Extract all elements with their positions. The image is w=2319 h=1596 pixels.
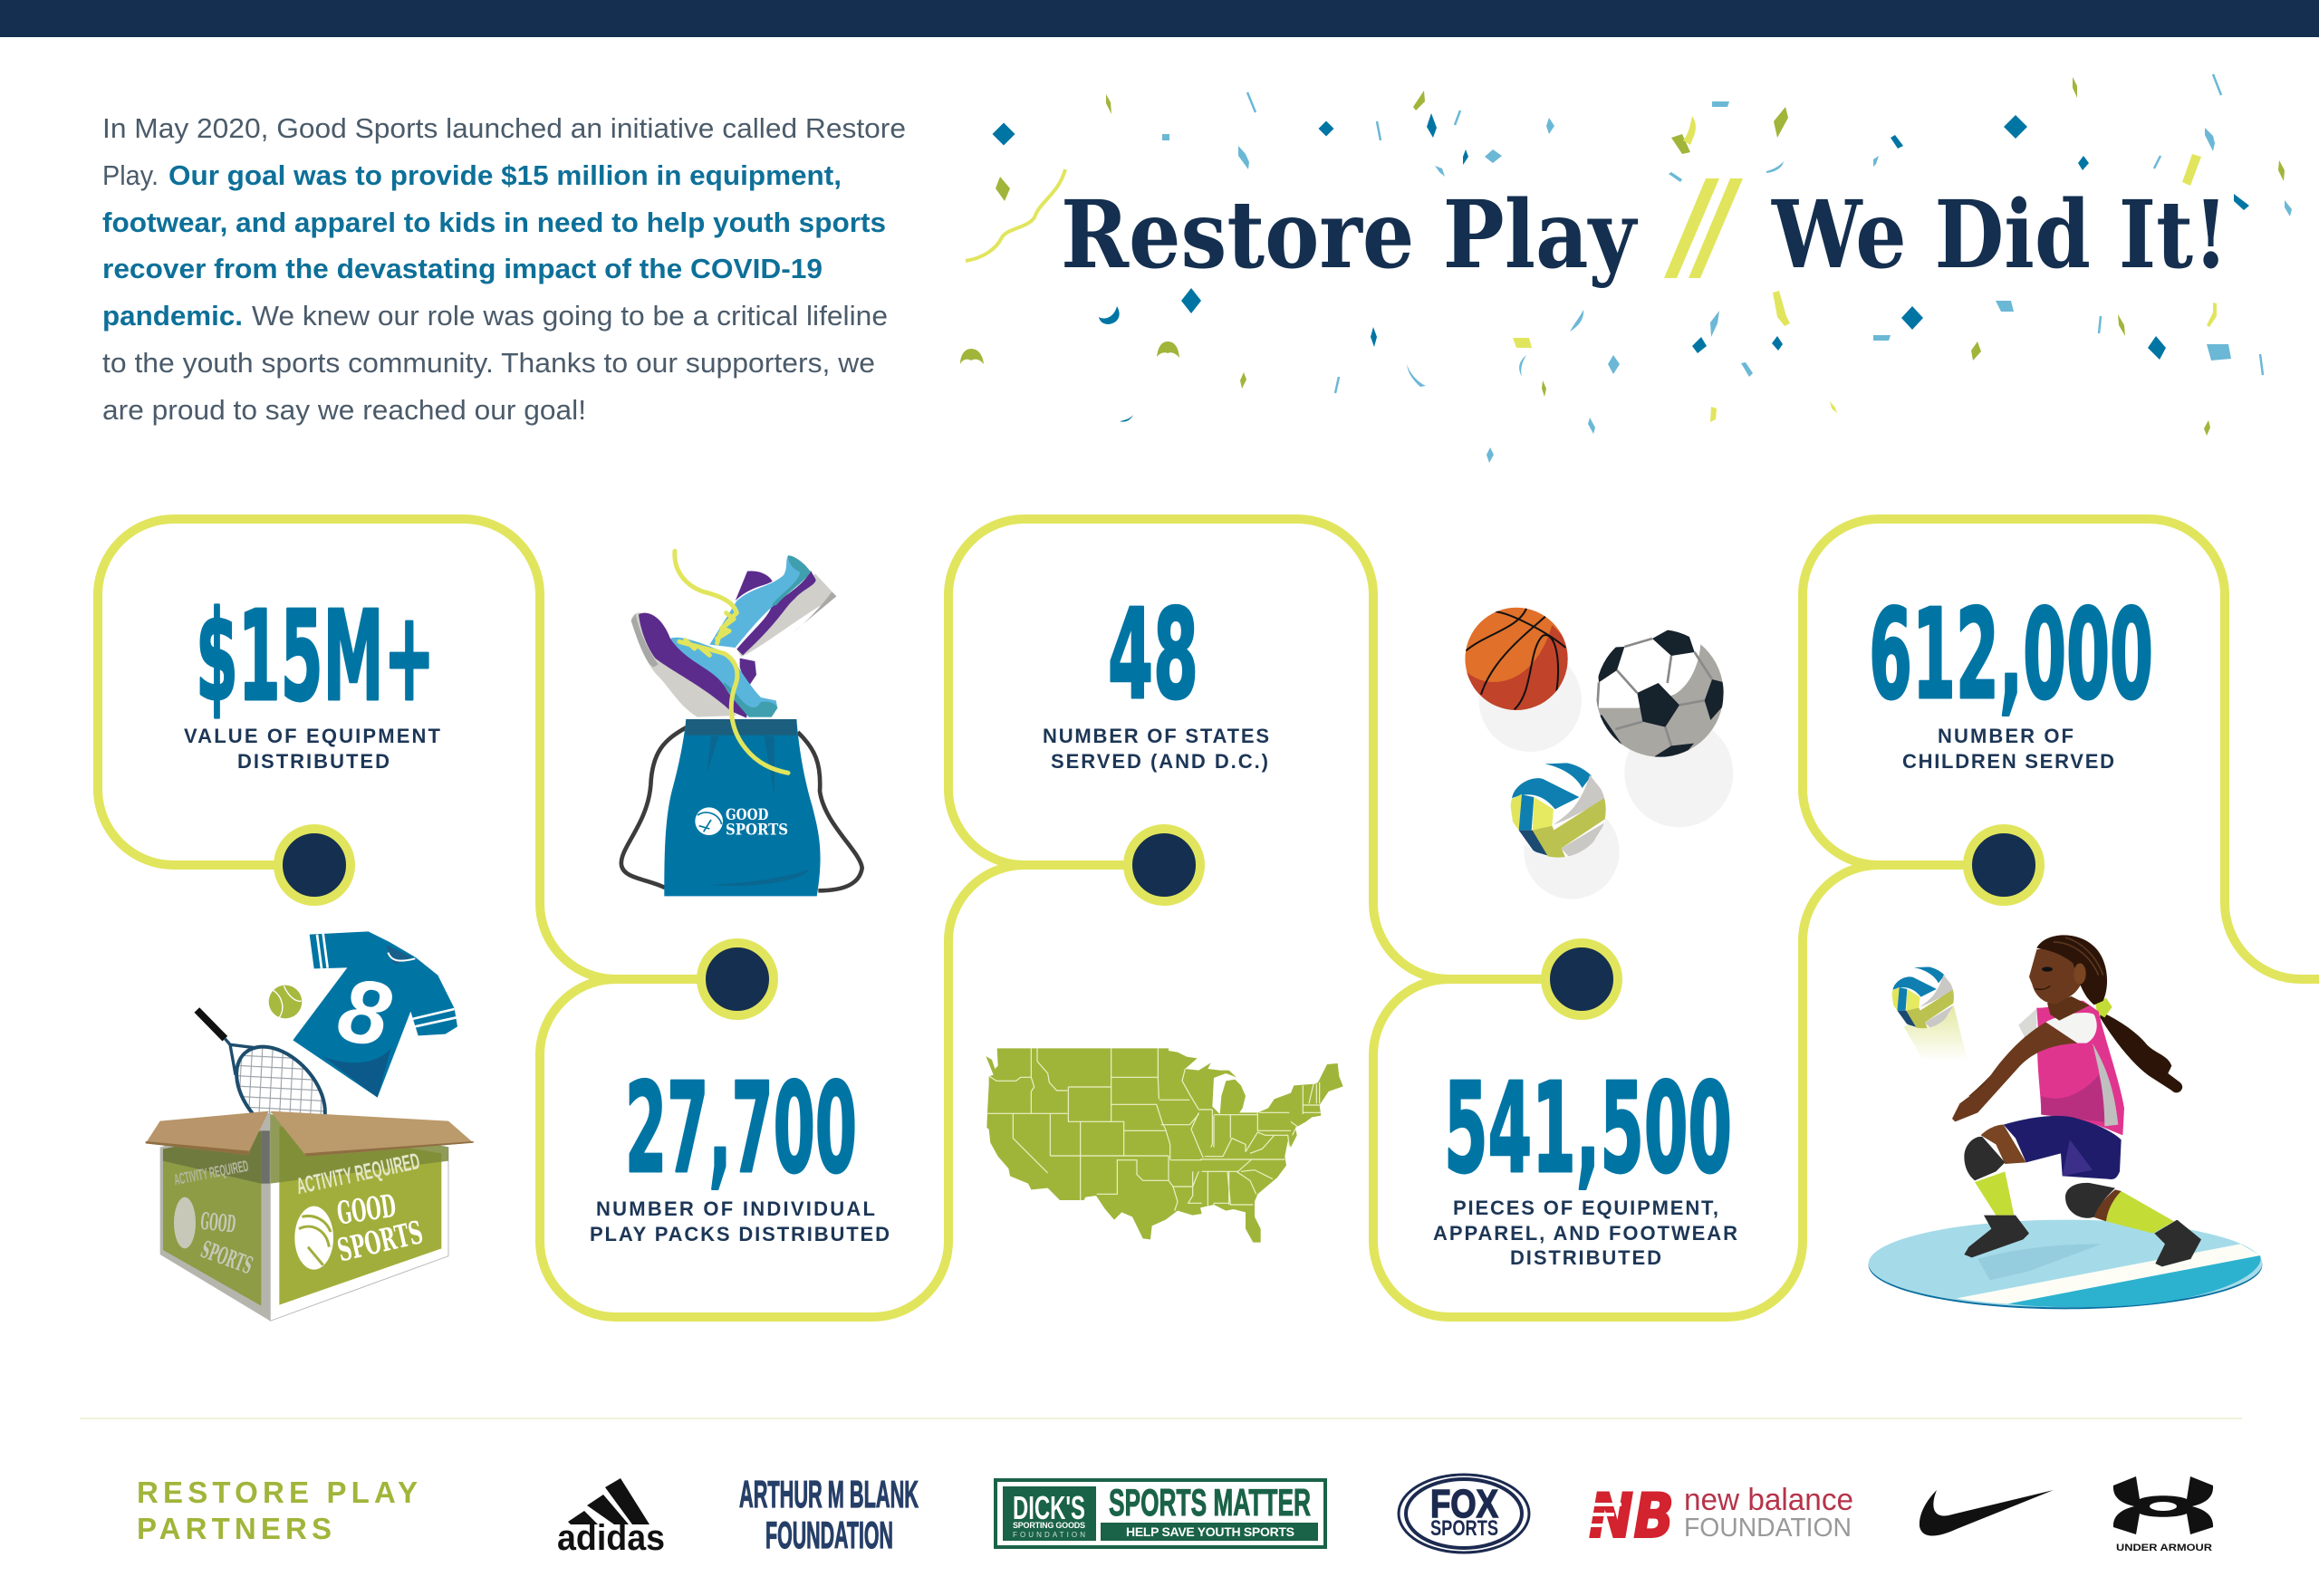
top navy band: [0, 0, 2319, 37]
far arm: [1968, 1031, 2035, 1099]
icon: box with jersey, racket and ball: [146, 931, 474, 1321]
illustration: volleyball player: [1869, 935, 2262, 1309]
intro paragraph: to the youth sports community. Thanks to our supporters, we: [102, 347, 875, 379]
shoelaces: [675, 551, 788, 773]
box right face text: GOOD: [335, 1187, 399, 1233]
panel: 48 states: SERVED (AND D.C.): [1051, 750, 1268, 773]
intro paragraph: recover from the devastating impact of the COVID-19: [102, 253, 823, 284]
bag logo: [695, 805, 788, 839]
intro paragraph: We knew our role was going to be a critical lifeline: [252, 300, 888, 332]
box left face text: [172, 1157, 256, 1280]
rear knee, sock and shoe: [2065, 1183, 2201, 1266]
panel: $15M+ equipment value: DISTRIBUTED: [237, 750, 390, 773]
top shoe: [709, 555, 836, 657]
bag logo: GOOD: [726, 805, 768, 823]
panel: $15M+ equipment value: [98, 519, 737, 979]
logo: Under Armour: [2113, 1476, 2213, 1553]
neck and head: [2029, 935, 2107, 1021]
logo: adidas: [557, 1478, 665, 1558]
confetti: [960, 74, 2292, 463]
intro paragraph: are proud to say we reached our goal!: [102, 394, 586, 426]
front thigh: [1981, 1125, 2026, 1164]
icon: racket: [197, 1010, 342, 1156]
logo: Dick's Sports Matter: FOUNDATION: [1013, 1531, 1085, 1539]
logo: Dick's Sports Matter: [996, 1480, 1325, 1547]
panel: 541,500 pieces: [1373, 865, 2004, 1317]
footer heading: partners: [137, 1476, 418, 1545]
panel: 27,700 play packs: NUMBER OF INDIVIDUAL: [596, 1197, 875, 1220]
title: [1061, 178, 2228, 290]
box flaps: [146, 1111, 474, 1157]
near arm: [1952, 1013, 2097, 1121]
intro paragraph: [102, 112, 906, 426]
logo: adidas: adidas: [557, 1518, 665, 1558]
bag logo: SPORTS: [726, 821, 788, 839]
intro paragraph: pandemic.: [102, 300, 243, 332]
ponytail: [2095, 998, 2182, 1092]
icon: jersey: 8: [332, 958, 398, 1067]
jersey: [2018, 1001, 2124, 1135]
intro paragraph: footwear, and apparel to kids in need to help youth sports: [102, 207, 886, 238]
logo: Nike swoosh: [1920, 1490, 2054, 1536]
logo: New Balance Foundation: FOUNDATION: [1684, 1514, 1852, 1543]
logo: Arthur M Blank Foundation: FOUNDATION: [765, 1514, 893, 1556]
panel: $15M+ equipment value: VALUE OF EQUIPMENT: [184, 725, 441, 747]
footer heading: partners: PARTNERS: [137, 1512, 332, 1545]
logo: Dick's Sports Matter: SPORTS MATTER: [1109, 1481, 1311, 1524]
panel: $15M+ equipment value: $15M+: [196, 585, 435, 729]
court disc: [1869, 1220, 2262, 1309]
front knee, sock and shoe: [1964, 1137, 2029, 1257]
logo: Fox Sports: FOX: [1430, 1482, 1498, 1526]
panel: 541,500 pieces: PIECES OF EQUIPMENT,: [1453, 1197, 1718, 1219]
box left face text: GOOD: [199, 1208, 237, 1239]
box right face text: ACTIVITY REQUIRED: [294, 1149, 422, 1199]
title slashes: [1664, 178, 1743, 278]
title: Restore Play: [1061, 180, 1639, 290]
logo: Fox Sports: SPORTS: [1430, 1516, 1498, 1541]
ball trail: [1904, 1005, 1968, 1062]
icon: soccer ball: [1596, 630, 1724, 757]
intro paragraph: In May 2020, Good Sports launched an initiative called Restore: [102, 112, 906, 144]
panel: 612,000 children: [1803, 519, 2319, 979]
logo: Dick's Sports Matter: SPORTING GOODS: [1013, 1521, 1085, 1530]
box right face text: SPORTS: [334, 1214, 427, 1269]
footer rule: [80, 1418, 2242, 1419]
icon: volleyball: [1510, 762, 1606, 858]
logo: Arthur M Blank Foundation: ARTHUR M BLANK: [739, 1473, 919, 1515]
panel: 27,700 play packs: PLAY PACKS DISTRIBUTED: [590, 1223, 890, 1245]
panel: 27,700 play packs: 27,700: [625, 1057, 857, 1201]
panel: 541,500 pieces: APPAREL, AND FOOTWEAR: [1433, 1222, 1737, 1245]
panel: 48 states: 48: [1108, 583, 1198, 727]
bottom shoe: [631, 612, 777, 718]
box left face text: ACTIVITY REQUIRED: [172, 1157, 250, 1188]
panel: 541,500 pieces: 541,500: [1444, 1057, 1732, 1201]
icon: ball in play: [1891, 966, 1954, 1029]
intro paragraph: Our goal was to provide $15 million in equipment,: [168, 159, 842, 191]
shorts: [2004, 1116, 2122, 1179]
panel: 612,000 children: NUMBER OF: [1938, 725, 2074, 747]
intro paragraph: Play.: [102, 159, 159, 191]
logo: Fox Sports: [1399, 1475, 1529, 1553]
logo: New Balance Foundation: NB: [1589, 1481, 1674, 1553]
icon: shoes and drawstring bag: [621, 551, 862, 896]
logo: New Balance Foundation: [1585, 1481, 1853, 1553]
icon: US map: [986, 1048, 1343, 1243]
panel: 27,700 play packs: [540, 865, 1164, 1317]
icon: sports balls: [1465, 608, 1733, 899]
logo: Dick's Sports Matter: DICK'S: [1013, 1489, 1085, 1526]
footer heading: partners: RESTORE PLAY: [137, 1476, 418, 1509]
panel: 48 states: NUMBER OF STATES: [1043, 725, 1269, 747]
logo: New Balance Foundation: new balance: [1684, 1483, 1853, 1517]
panel: 48 states: [948, 519, 1582, 979]
icon: jersey: [293, 931, 457, 1098]
box faces: [160, 1112, 448, 1321]
logo: Under Armour: UNDER ARMOUR: [2116, 1543, 2212, 1553]
bag body: [664, 719, 821, 896]
logo: Dick's Sports Matter: HELP SAVE YOUTH SPORTS: [1126, 1524, 1294, 1539]
icon: basketball: [1465, 608, 1570, 713]
box left face text: SPORTS: [197, 1236, 256, 1280]
logo: Arthur M Blank Foundation: [739, 1473, 919, 1556]
icon: tennis ball: [269, 985, 302, 1018]
title: We Did It!: [1771, 180, 2228, 290]
panel: 612,000 children: CHILDREN SERVED: [1902, 750, 2114, 773]
box right face text: [294, 1149, 427, 1270]
panel: 541,500 pieces: DISTRIBUTED: [1510, 1246, 1661, 1269]
